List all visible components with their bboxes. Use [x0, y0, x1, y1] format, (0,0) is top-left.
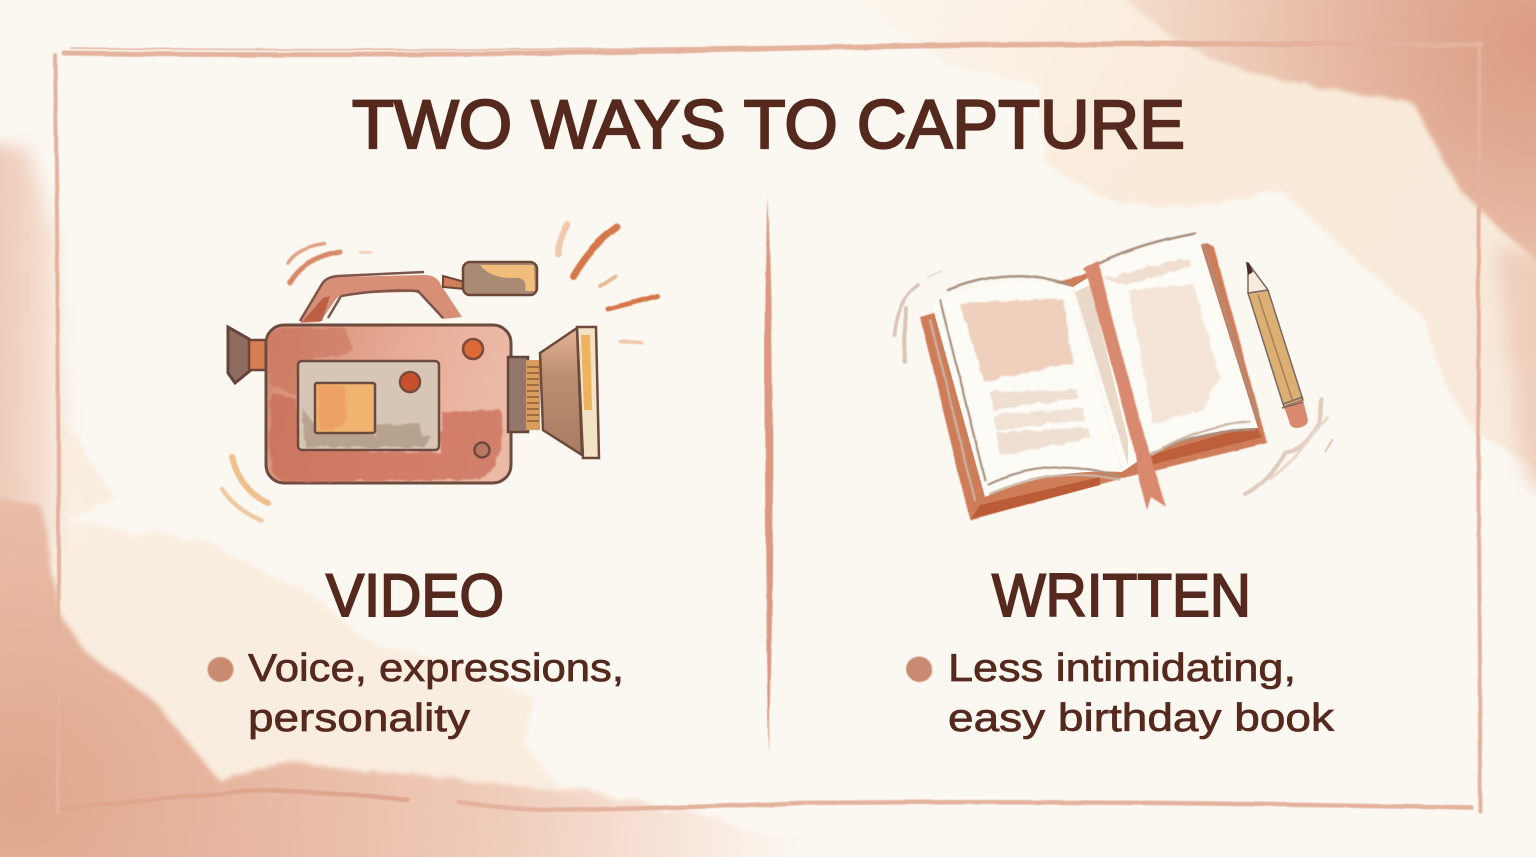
buttons [400, 372, 420, 392]
bullet text: Voice, expressions, [248, 647, 624, 690]
pencil [1246, 262, 1308, 428]
bullet text: personality [248, 697, 471, 740]
title: TWO WAYS TO CAPTURE [352, 86, 1185, 163]
icon: video camera [222, 224, 657, 521]
microphone [443, 276, 465, 289]
lens hood [540, 328, 582, 455]
icon: open book [894, 233, 1333, 520]
ribbon bookmark [1085, 261, 1166, 510]
heading: video: VIDEO [326, 562, 504, 629]
screen panel [298, 361, 439, 450]
panel: written label [906, 562, 1335, 740]
center divider [764, 198, 773, 755]
bullet text: Less intimidating, [948, 647, 1296, 690]
bullet [906, 656, 932, 682]
page edges [930, 233, 1258, 500]
bullet text: easy birthday book [948, 697, 1335, 740]
handle [300, 275, 462, 323]
eyepiece [228, 327, 251, 383]
lens barrel [508, 357, 528, 432]
viewfinder [315, 383, 375, 433]
motion strokes [222, 224, 657, 521]
heading: written: WRITTEN [992, 562, 1251, 629]
bullet [207, 656, 233, 682]
cover [920, 243, 1267, 520]
panel: video label [207, 562, 624, 740]
right page [1073, 233, 1258, 472]
body [266, 325, 511, 483]
left page [932, 281, 1122, 497]
motion strokes [894, 271, 1333, 494]
gutter shadow [1075, 285, 1128, 465]
text washes [960, 258, 1220, 456]
